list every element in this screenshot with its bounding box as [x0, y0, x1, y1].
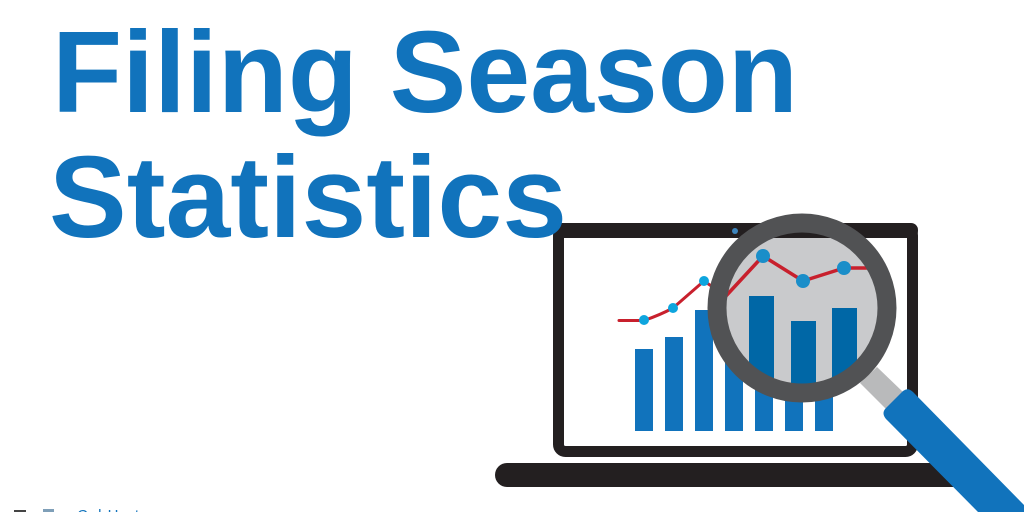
magnified chart: [727, 232, 867, 384]
footer logo (cropped): [14, 507, 140, 512]
handle grip: [884, 389, 1024, 512]
title: Filing Season: [52, 7, 798, 137]
title: Statistics: [49, 132, 567, 262]
handle neck: [860, 367, 903, 409]
bar chart: [635, 310, 833, 431]
lens rim: [717, 223, 887, 393]
lens glass: [722, 228, 882, 388]
magnifying glass: [717, 223, 1024, 512]
illustration: laptop with chart: [495, 223, 975, 487]
top bezel: [553, 223, 918, 238]
line chart: [619, 276, 731, 325]
title: [49, 7, 798, 262]
laptop base: [495, 463, 975, 487]
laptop screen: [558, 228, 912, 452]
webcam: [732, 228, 738, 234]
